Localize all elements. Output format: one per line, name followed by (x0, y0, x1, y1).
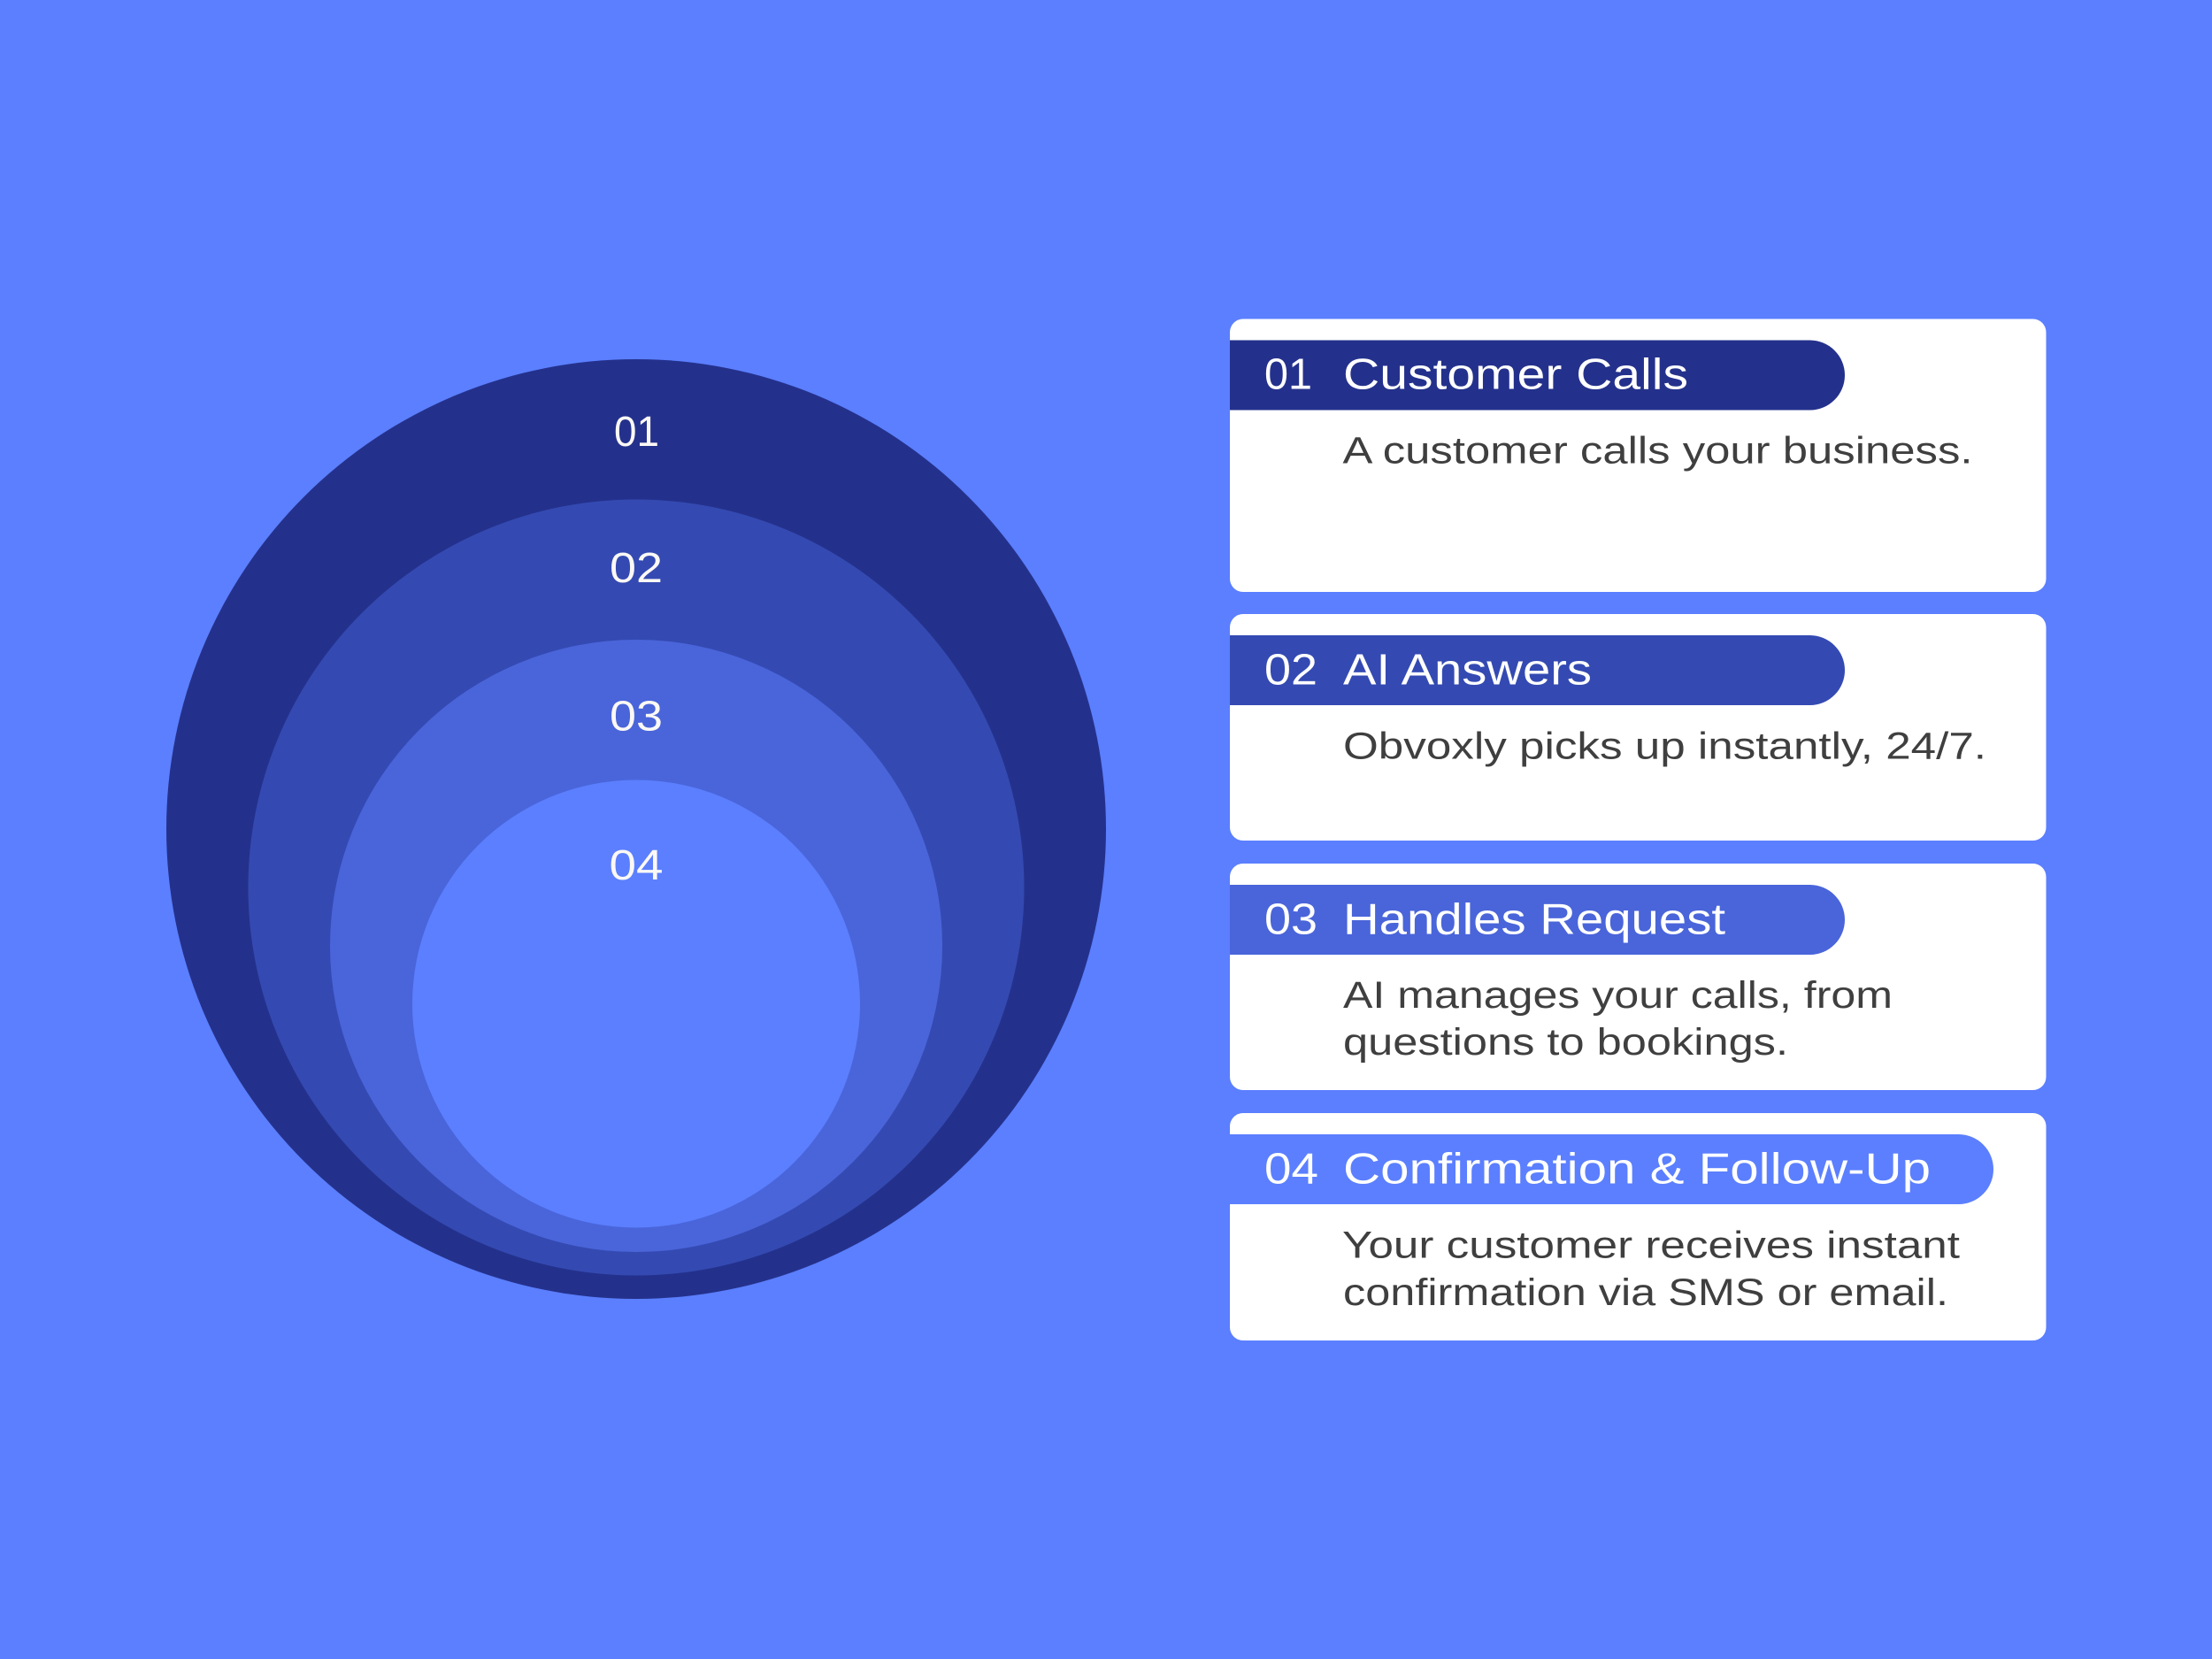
description 03 line 1: AI manages your calls, from (1343, 974, 1893, 1017)
nested circles diagram (166, 359, 1106, 1299)
panel: step 03 (1230, 864, 2046, 1090)
panel: step 01 (1230, 319, 2046, 592)
step number 03: 03 (1264, 895, 1317, 943)
circle label 02: 02 (610, 545, 663, 592)
heading: Handles Request: Handles Request (1343, 895, 1725, 943)
circle 01 (166, 359, 1106, 1299)
circle 04 (412, 780, 860, 1228)
header bar 03 (1230, 885, 1845, 955)
header bar 02 (1230, 635, 1845, 705)
description 04 line 1: Your customer receives instant (1342, 1225, 1960, 1267)
step number 04: 04 (1264, 1145, 1318, 1193)
description 02: Obvoxly picks up instantly, 24/7. (1343, 726, 1986, 768)
panel: step 02 (1230, 614, 2046, 841)
circle label 03: 03 (610, 694, 663, 740)
panel: step 04 (1230, 1113, 2046, 1340)
circle label 04: 04 (609, 842, 664, 889)
header bar 04 (1230, 1134, 1993, 1204)
heading: Customer Calls: Customer Calls (1343, 350, 1688, 398)
description 04 line 2: confirmation via SMS or email. (1343, 1271, 1948, 1314)
description 03 line 2: questions to bookings. (1343, 1021, 1788, 1064)
circle 03 (330, 640, 942, 1252)
circle label 01: 01 (614, 409, 659, 456)
description 01: A customer calls your business. (1343, 430, 1973, 472)
heading: Confirmation & Follow-Up: Confirmation & Follow-Up (1343, 1145, 1931, 1193)
step number 01: 01 (1264, 350, 1312, 398)
step number 02: 02 (1264, 646, 1317, 694)
circle 02 (248, 499, 1025, 1276)
header bar 01 (1230, 340, 1845, 411)
heading: AI Answers: AI Answers (1343, 646, 1592, 694)
